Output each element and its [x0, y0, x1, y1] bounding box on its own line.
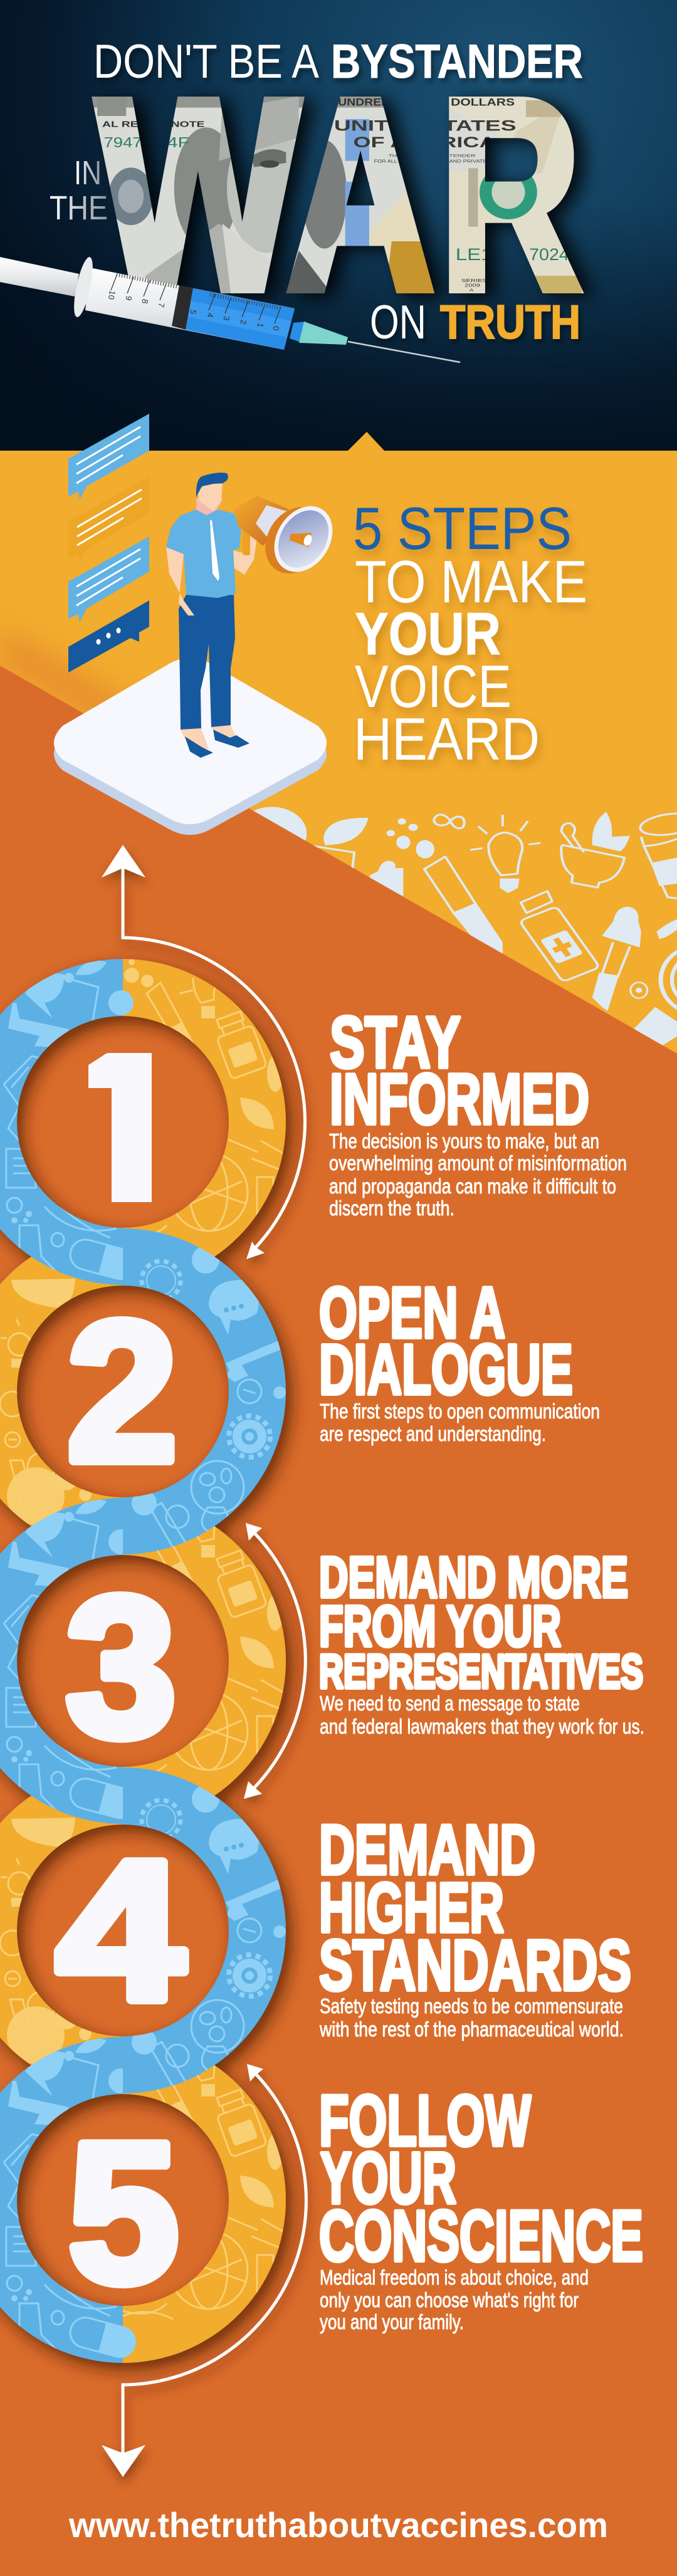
heading: on truth: TRUTH [440, 296, 580, 349]
icon: syringe: 9 [123, 295, 134, 301]
heading: 5 steps to make your voice heard: 5 STEPS [353, 495, 572, 562]
step 5: follow your conscience: you and your family. [320, 2310, 464, 2333]
icon: syringe: 7 [156, 302, 166, 308]
heading: WAR filled with banknote: R [440, 45, 580, 345]
step 5: follow your conscience: YOUR [320, 2137, 456, 2219]
heading: in the [50, 154, 108, 227]
step 1: stay informed: and propaganda can make it difficult to [329, 1175, 616, 1198]
heading: don't be a bystander: DON'T BE A [93, 35, 319, 88]
step 2: open a dialogue: OPEN A [319, 1273, 505, 1353]
icon: syringe: 3 [221, 315, 231, 322]
heading: WAR filled with banknote [97, 45, 580, 345]
icon: chat bubbles [68, 414, 149, 673]
heading: on truth: ON [370, 296, 426, 349]
number 1: 1 [67, 1012, 187, 1253]
arrow: bottom arc around ring 5 [102, 2064, 306, 2477]
step 3: demand more from your representatives: FROM YOUR [319, 1594, 561, 1658]
heading: in the: IN [74, 154, 102, 192]
panel: yellow intro band [0, 432, 677, 1054]
step 5: follow your conscience: Medical freedom is about choice, and [320, 2266, 589, 2289]
footer: website: www.thetruthaboutvaccines.com [68, 2505, 608, 2545]
icon: syringe: 8 [140, 298, 150, 305]
icon: syringe: 5 [188, 309, 198, 315]
figure: man with megaphone [166, 473, 344, 758]
step 4: demand higher standards: HIGHER [319, 1869, 504, 1947]
heading: don't be a bystander [93, 35, 583, 88]
arrow: double-headed arc around ring 3 [244, 1523, 305, 1799]
number 2: 2 [67, 1280, 177, 1503]
step 4: demand higher standards: DEMAND [319, 1811, 535, 1889]
step 2: open a dialogue: The first steps to open communication [320, 1400, 600, 1423]
number 5: 5 [68, 2102, 179, 2324]
icons: medical line art on the diagonal [237, 807, 677, 1047]
icon: syringe: 10 [107, 290, 117, 300]
heading: in the: THE [50, 189, 108, 227]
orange diagonal overlay [0, 666, 677, 1191]
heading: WAR filled with banknote: W [97, 45, 301, 345]
heading: on truth [370, 296, 580, 349]
step 5: follow your conscience: only you can choose what's right for [320, 2288, 579, 2312]
heading: WAR filled with banknote: A [287, 45, 434, 345]
icon: syringe: 1 [255, 322, 265, 328]
step 2: open a dialogue [319, 1273, 600, 1445]
panel: dark header [0, 0, 677, 451]
step 1: stay informed [329, 1002, 627, 1220]
arrow: top arc around ring 1 [102, 845, 305, 1259]
step 1: stay informed: The decision is yours to make, but an [329, 1129, 599, 1153]
graphic: interlocking rings [0, 959, 286, 2363]
number 4: 4 [56, 1819, 186, 2042]
icon: syringe: 2 [238, 319, 248, 325]
icon: syringe: 4 [205, 312, 215, 318]
heading: don't be a bystander: BYSTANDER [331, 35, 583, 88]
platform [54, 658, 327, 835]
heading: 5 steps to make your voice heard: TO MAKE [355, 548, 587, 615]
step 3: demand more from your representatives: We need to send a message to state [320, 1692, 580, 1715]
heading: 5 steps to make your voice heard: VOICE [355, 653, 512, 720]
step 5: follow your conscience [319, 2081, 643, 2333]
step 2: open a dialogue: are respect and understanding. [320, 1422, 546, 1445]
heading: 5 steps to make your voice heard: HEARD [354, 706, 540, 773]
icon: syringe [0, 256, 460, 362]
step 1: stay informed: STAY [330, 1002, 461, 1083]
heading: 5 steps to make your voice heard [353, 495, 587, 773]
step 3: demand more from your representatives [319, 1546, 644, 1738]
step 1: stay informed: discern the truth. [329, 1196, 454, 1220]
step 4: demand higher standards [319, 1811, 631, 2041]
number 3: 3 [66, 1556, 176, 1778]
soft shade above the diagonal [0, 627, 163, 760]
heading: 5 steps to make your voice heard: YOUR [355, 600, 501, 668]
step 5: follow your conscience: FOLLOW [319, 2081, 531, 2161]
icon: syringe: 0 [271, 325, 281, 332]
